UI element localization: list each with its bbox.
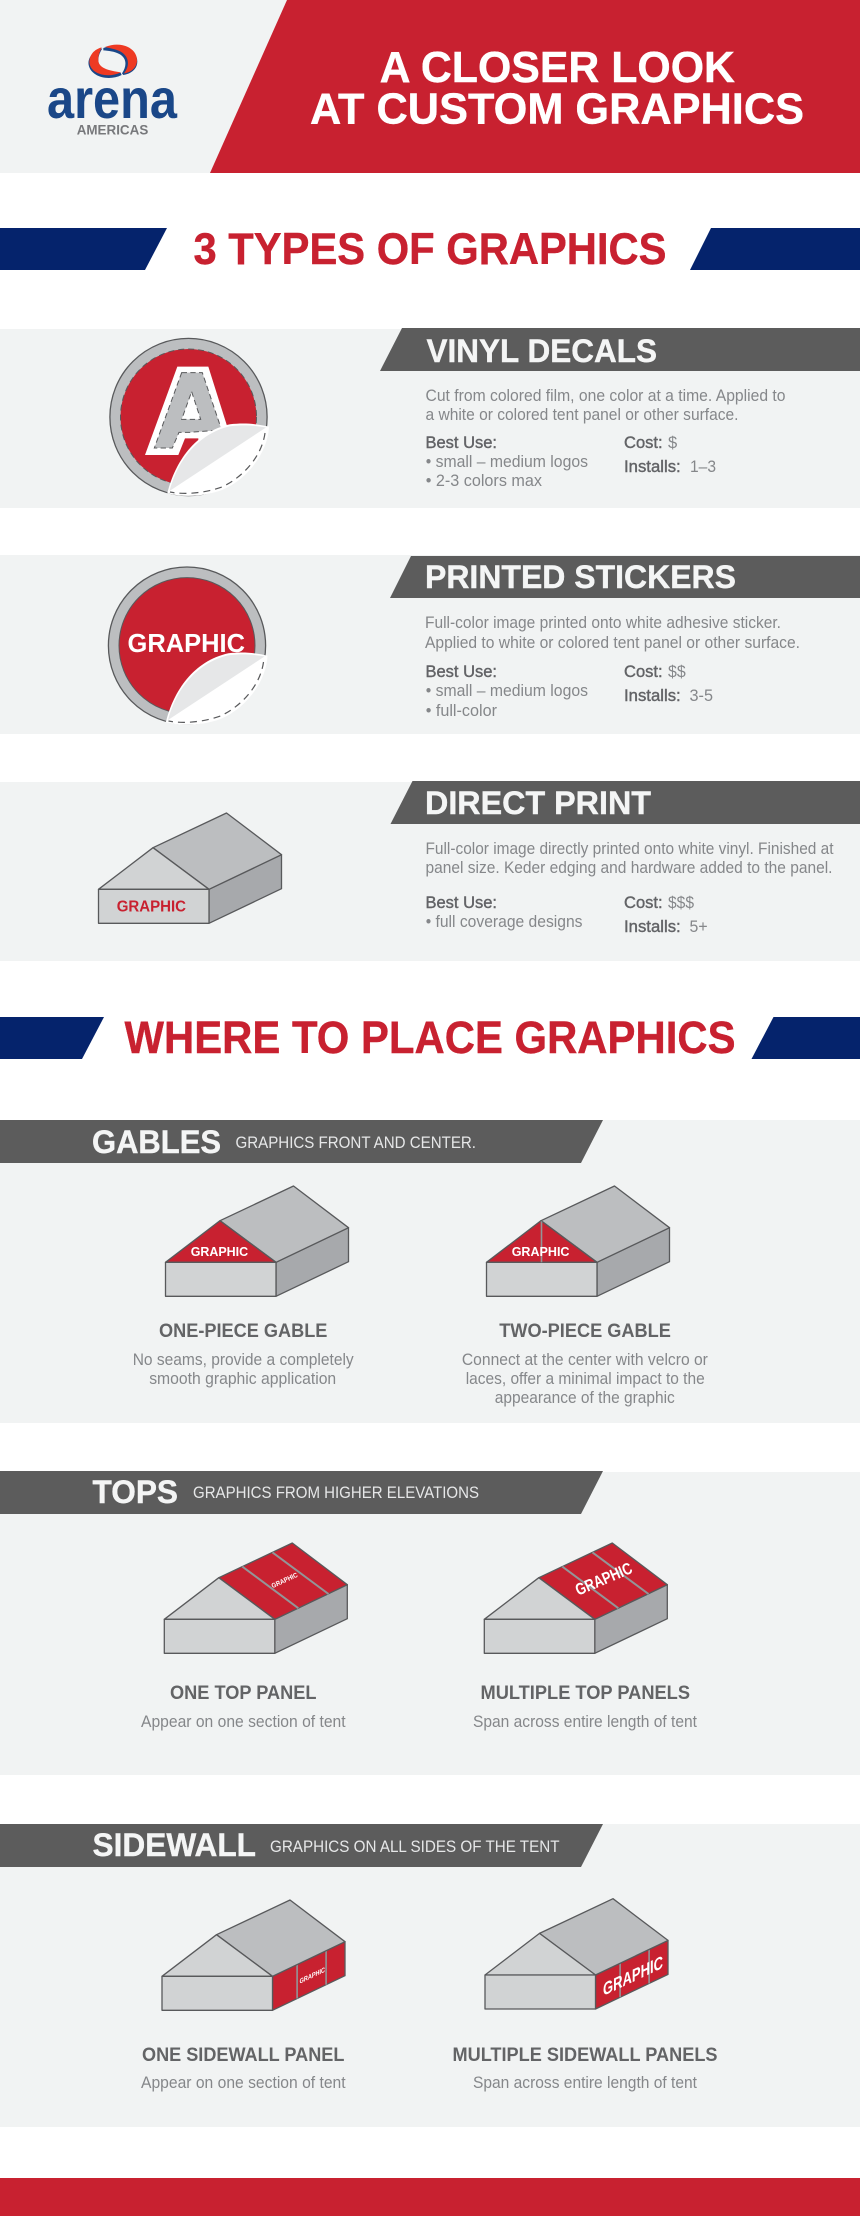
caption: two-piece gable: appearance of the graphic (495, 1389, 675, 1407)
panel: sidewall (0, 1824, 860, 2127)
best use list: Best Use: (426, 663, 497, 681)
best use list: • small – medium logos (426, 453, 588, 471)
heading bar: gables: GABLES (92, 1124, 221, 1160)
section heading: 3 types of graphics: 3 TYPES OF GRAPHICS (194, 225, 666, 274)
logo: arena americas: arena (47, 67, 178, 130)
caption: multiple top panels (473, 1683, 697, 1731)
description: Full-color image directly printed onto white vinyl. Finished at (426, 840, 834, 858)
panel: direct print (0, 781, 860, 961)
heading bar: tops: GRAPHICS FROM HIGHER ELEVATIONS (193, 1484, 479, 1502)
cost and installs: 3-5 (690, 687, 713, 705)
icon: tent with direct print (98, 813, 282, 923)
icon: two-piece gable tent (486, 1186, 670, 1296)
icon: one top panel tent: GRAPHIC (271, 1572, 299, 1590)
heading bar: vinyl decals: VINYL DECALS (426, 333, 657, 369)
caption: two-piece gable: TWO-PIECE GABLE (499, 1321, 671, 1342)
caption: one sidewall panel: ONE SIDEWALL PANEL (142, 2045, 345, 2066)
icon: vinyl decal sticker (110, 338, 269, 496)
caption: one-piece gable: ONE-PIECE GABLE (159, 1321, 327, 1342)
cost and installs: Cost: (624, 663, 663, 681)
cost and installs: 1–3 (690, 458, 716, 476)
cost and installs: Cost: (624, 434, 663, 452)
caption: two-piece gable: laces, offer a minimal impact to the (466, 1370, 705, 1388)
panel: gables (0, 1120, 860, 1423)
heading bar: gables (0, 1120, 603, 1163)
best use list: Best Use: (426, 434, 497, 452)
caption: one-piece gable: smooth graphic application (149, 1370, 336, 1388)
logo: arena americas: AMERICAS (77, 122, 148, 137)
title: AT CUSTOM GRAPHICS (310, 84, 804, 134)
panel: tops (0, 1471, 860, 1775)
icon: multiple top panels tent: GRAPHIC (573, 1559, 635, 1599)
header banner (0, 0, 860, 173)
cost and installs (624, 434, 716, 476)
best use list (426, 894, 582, 931)
caption: one top panel: ONE TOP PANEL (170, 1683, 317, 1704)
icon: one sidewall panel tent (162, 1900, 345, 2010)
description: Cut from colored film, one color at a time. Applied to (426, 387, 786, 405)
cost and installs: Cost: (624, 894, 663, 912)
caption: one sidewall panel: Appear on one section of tent (141, 2074, 346, 2092)
logo: arena americas (47, 45, 178, 137)
caption: one-piece gable: No seams, provide a completely (133, 1351, 354, 1369)
heading bar: printed stickers (390, 556, 860, 598)
cost and installs (624, 894, 708, 936)
cost and installs: 5+ (690, 918, 708, 936)
best use list (426, 434, 588, 490)
best use list: • small – medium logos (426, 682, 588, 700)
cost and installs: $$ (668, 663, 686, 681)
icon: multiple top panels tent (484, 1543, 667, 1653)
icon: printed sticker: GRAPHIC (128, 630, 245, 658)
cost and installs: Installs: (624, 918, 681, 936)
caption: one-piece gable (133, 1321, 354, 1388)
icon: one top panel tent (164, 1543, 347, 1653)
cost and installs: Installs: (624, 458, 681, 476)
title: A CLOSER LOOK (380, 43, 735, 92)
heading bar: sidewall (0, 1824, 603, 1867)
best use list: • 2-3 colors max (426, 472, 543, 490)
footer bar (0, 2178, 860, 2216)
best use list (426, 663, 588, 720)
description: a white or colored tent panel or other surface. (426, 406, 738, 424)
caption: one top panel (141, 1683, 346, 1731)
description: panel size. Keder edging and hardware added to the panel. (426, 859, 832, 877)
cost and installs: $$$ (668, 894, 694, 912)
icon: tent with direct print: GRAPHIC (117, 899, 186, 916)
icon: two-piece gable tent: GRAPHIC (512, 1244, 570, 1259)
icon: one-piece gable tent: GRAPHIC (191, 1244, 248, 1259)
caption: one sidewall panel (141, 2045, 346, 2092)
heading bar: direct print: DIRECT PRINT (425, 785, 651, 821)
caption: multiple top panels: MULTIPLE TOP PANELS (480, 1683, 690, 1704)
icon: one-piece gable tent (166, 1186, 348, 1296)
caption: two-piece gable: Connect at the center with velcro or (462, 1351, 708, 1369)
panel: printed stickers (0, 555, 860, 734)
best use list: • full-color (426, 702, 497, 720)
heading bar: direct print (390, 781, 860, 824)
cost and installs: Installs: (624, 687, 681, 705)
best use list: Best Use: (426, 894, 497, 912)
icon: multiple sidewall panels tent: GRAPHIC (603, 1952, 663, 2001)
caption: one top panel: Appear on one section of tent (141, 1713, 346, 1731)
section heading: where to place graphics: WHERE TO PLACE GRAPHICS (124, 1012, 736, 1063)
cost and installs (624, 663, 713, 705)
caption: two-piece gable (462, 1321, 708, 1407)
heading bar: printed stickers: PRINTED STICKERS (425, 559, 736, 595)
icon: printed sticker (108, 567, 268, 725)
description: Applied to white or colored tent panel or other surface. (425, 634, 800, 652)
cost and installs: $ (668, 434, 677, 452)
heading bar: tops: TOPS (92, 1474, 178, 1510)
heading bar: sidewall: GRAPHICS ON ALL SIDES OF THE TENT (270, 1838, 560, 1856)
heading bar: tops (0, 1471, 603, 1514)
caption: multiple sidewall panels (452, 2045, 718, 2092)
heading bar: vinyl decals (380, 328, 860, 371)
caption: multiple top panels: Span across entire length of tent (473, 1713, 697, 1731)
best use list: • full coverage designs (426, 913, 582, 931)
icon: multiple sidewall panels tent (485, 1899, 668, 2009)
icon: one sidewall panel tent: GRAPHIC (300, 1965, 325, 1986)
caption: multiple sidewall panels: MULTIPLE SIDEWALL PANELS (452, 2045, 718, 2066)
description: Full-color image printed onto white adhesive sticker. (425, 614, 781, 632)
section heading: 3 types of graphics (0, 225, 860, 274)
heading bar: sidewall: SIDEWALL (92, 1827, 256, 1863)
panel: vinyl decals (0, 328, 860, 508)
caption: multiple sidewall panels: Span across entire length of tent (473, 2074, 697, 2092)
heading bar: gables: GRAPHICS FRONT AND CENTER. (236, 1134, 476, 1152)
